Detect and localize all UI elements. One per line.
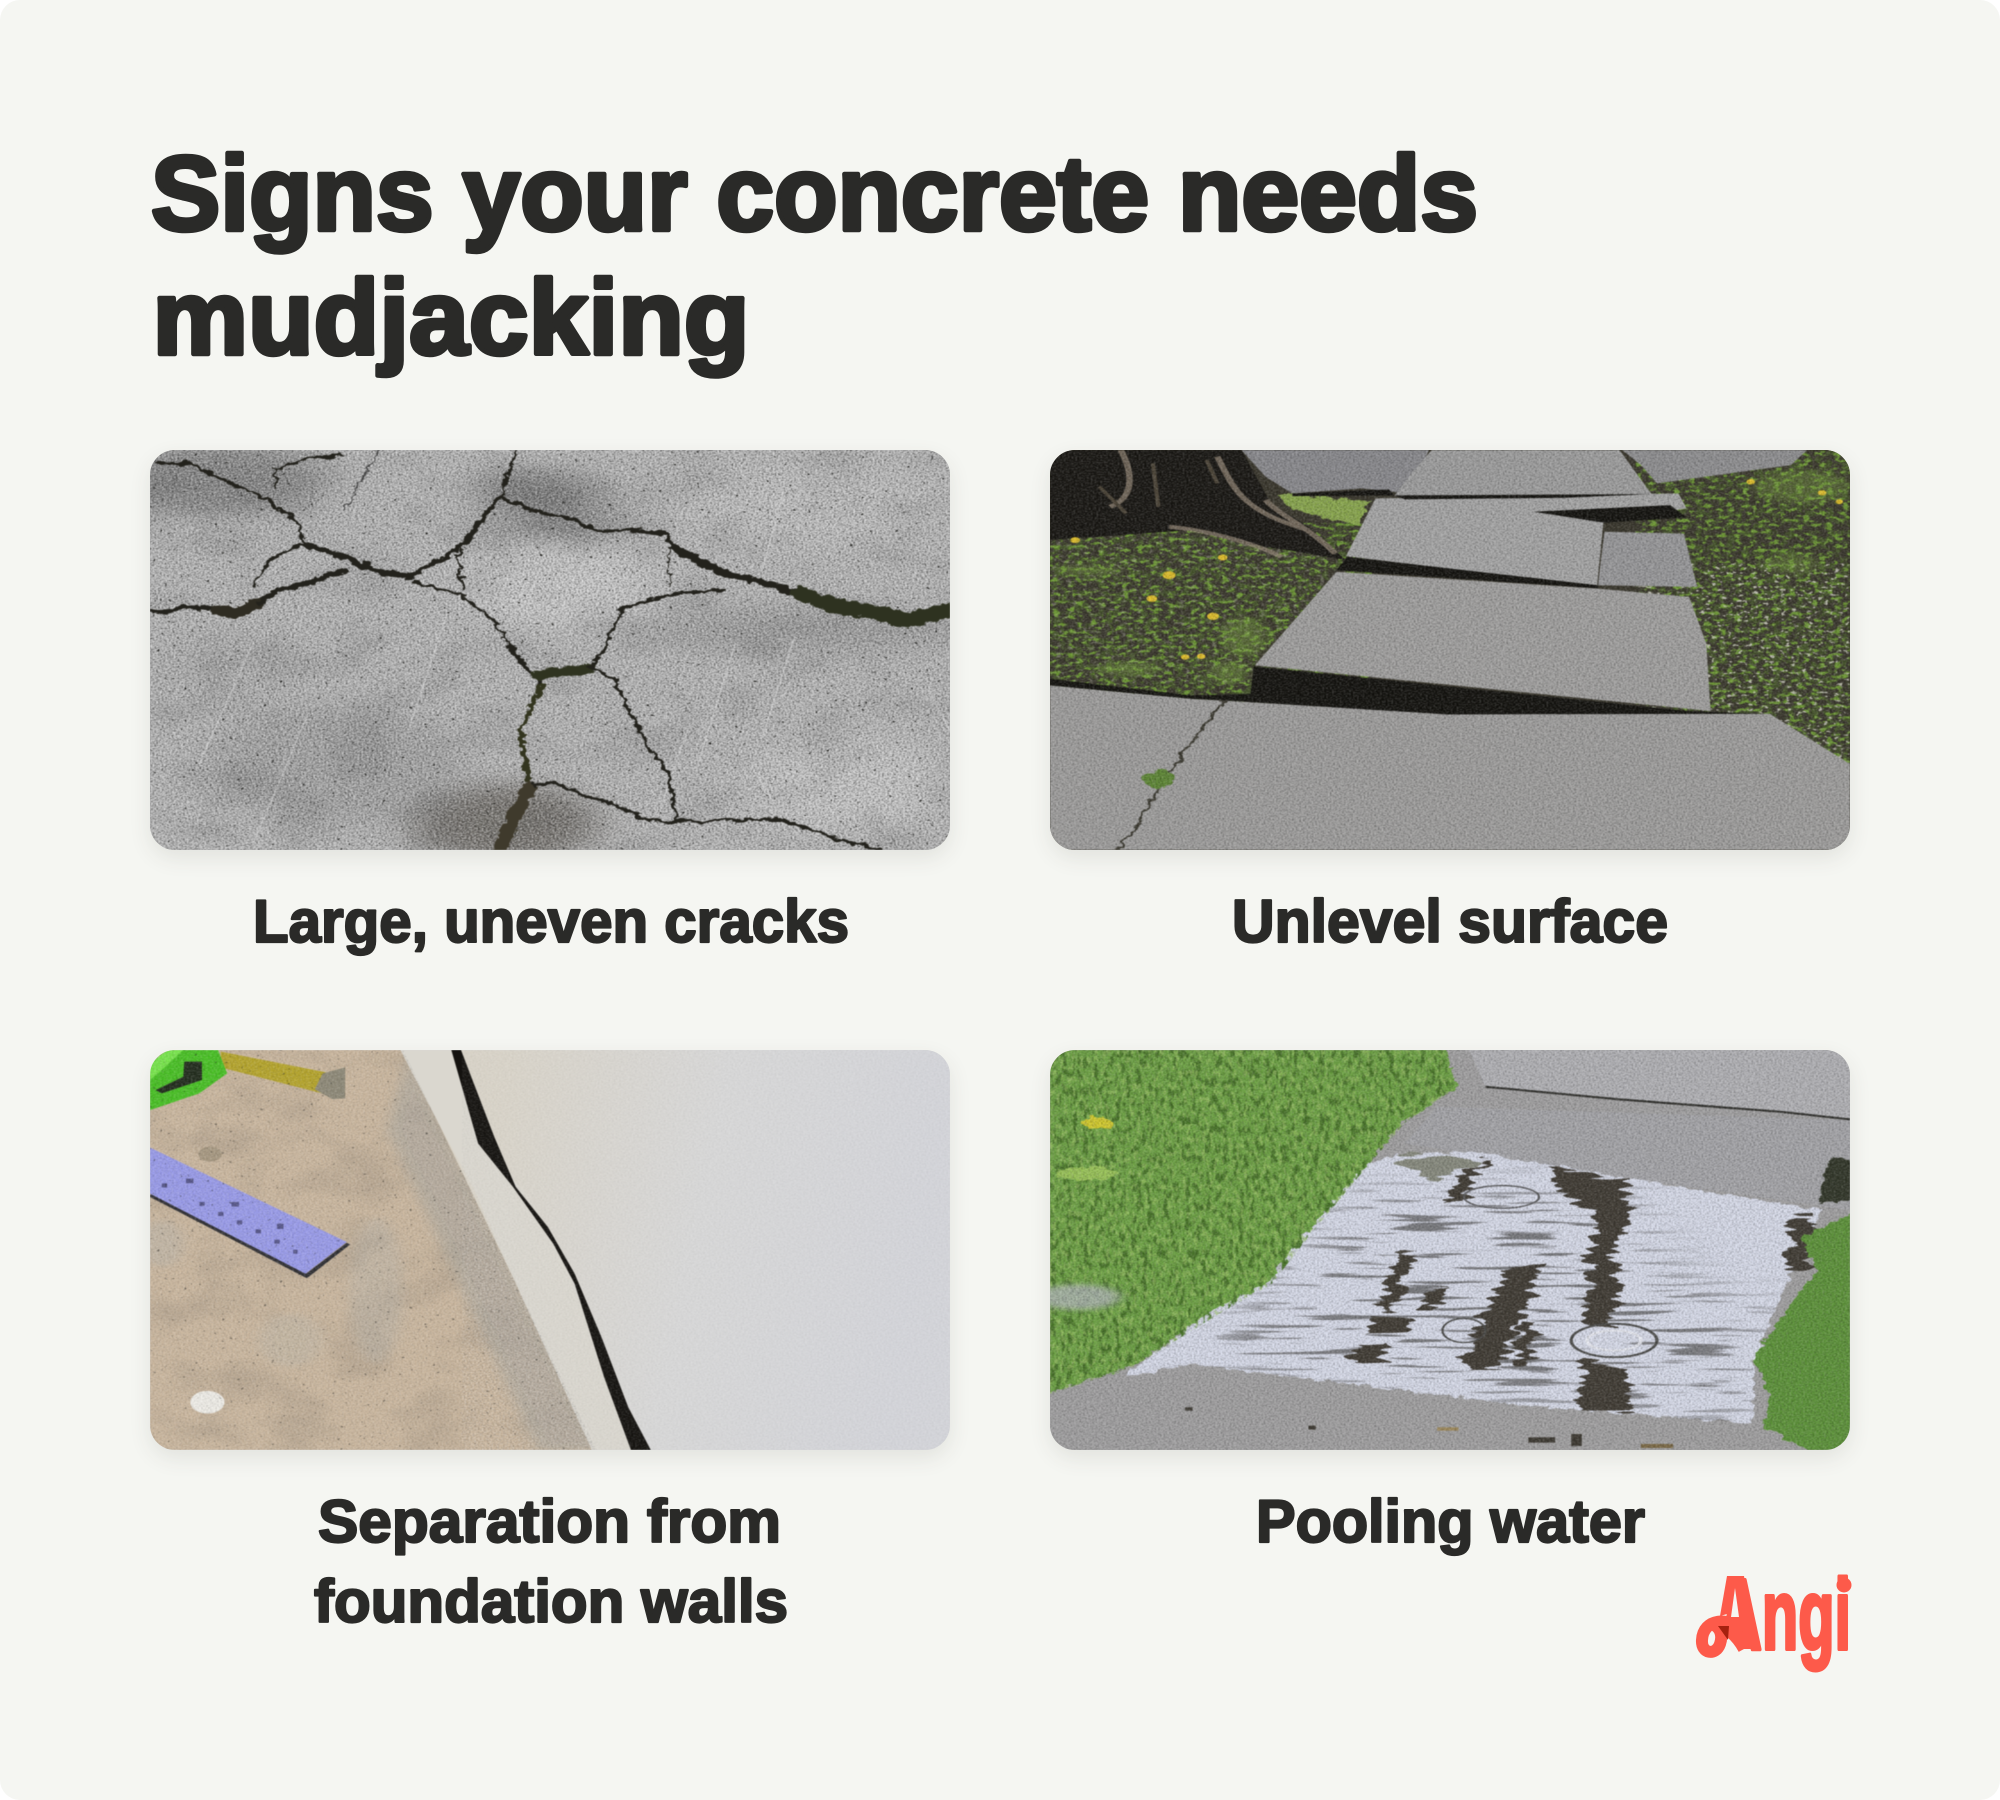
tree trunk bbox=[1050, 450, 1346, 560]
ripple rings bbox=[1442, 1186, 1657, 1357]
left grass texture bbox=[1050, 523, 1372, 710]
debris bbox=[1185, 1407, 1673, 1448]
wet sidewalk bbox=[1050, 1050, 1850, 1450]
yellow flowers bbox=[1070, 479, 1843, 660]
slab gaps bbox=[1050, 489, 1770, 714]
caption: unlevel surface: Unlevel surface bbox=[1232, 888, 1668, 955]
sidewalk slabs bbox=[1050, 450, 1850, 850]
grass shading bbox=[1050, 1050, 1468, 1394]
tree reflection bbox=[1346, 1155, 1818, 1411]
small weed bbox=[1143, 770, 1173, 788]
panel: pooling water photo bbox=[1050, 1050, 1850, 1450]
title bbox=[151, 135, 1478, 379]
slab crack bbox=[1115, 701, 1225, 850]
foundation gap bbox=[451, 1050, 651, 1450]
small leaves bbox=[1056, 1167, 1115, 1180]
grass right bbox=[1753, 1207, 1866, 1457]
title: Signs your concrete needs bbox=[151, 135, 1478, 253]
slab joint bbox=[1485, 1087, 1850, 1119]
tape measure blade bbox=[221, 1052, 345, 1099]
grass upper left bbox=[1035, 1040, 1459, 1397]
caption: large uneven cracks: Large, uneven cracks bbox=[253, 888, 849, 955]
caption: pooling water: Pooling water bbox=[1256, 1488, 1645, 1555]
panel: unlevel surface photo bbox=[1050, 450, 1850, 850]
yellow flower bbox=[1082, 1116, 1112, 1129]
tape measure body bbox=[150, 1050, 227, 1110]
panel: large uneven cracks photo bbox=[150, 450, 950, 850]
wall bbox=[150, 1050, 950, 1450]
weeds bbox=[1818, 1157, 1855, 1204]
puddle bbox=[1126, 1152, 1823, 1424]
caption: separation from foundation walls: Separation from bbox=[318, 1488, 781, 1555]
right grass texture bbox=[1636, 450, 1850, 771]
title: mudjacking bbox=[152, 259, 750, 377]
floor bbox=[140, 1050, 611, 1450]
panel: separation from foundation walls photo bbox=[150, 1050, 950, 1450]
water patch on the lawn edge bbox=[1035, 1284, 1121, 1310]
bright grass tuft bbox=[1279, 493, 1373, 525]
crack lines bbox=[150, 450, 950, 850]
concrete lip bbox=[400, 1050, 631, 1450]
concrete broom streaks bbox=[199, 490, 950, 844]
steel ruler bbox=[150, 1147, 348, 1276]
ripples bbox=[1168, 1167, 1782, 1422]
caption: separation from foundation walls: foundation walls bbox=[314, 1568, 788, 1635]
